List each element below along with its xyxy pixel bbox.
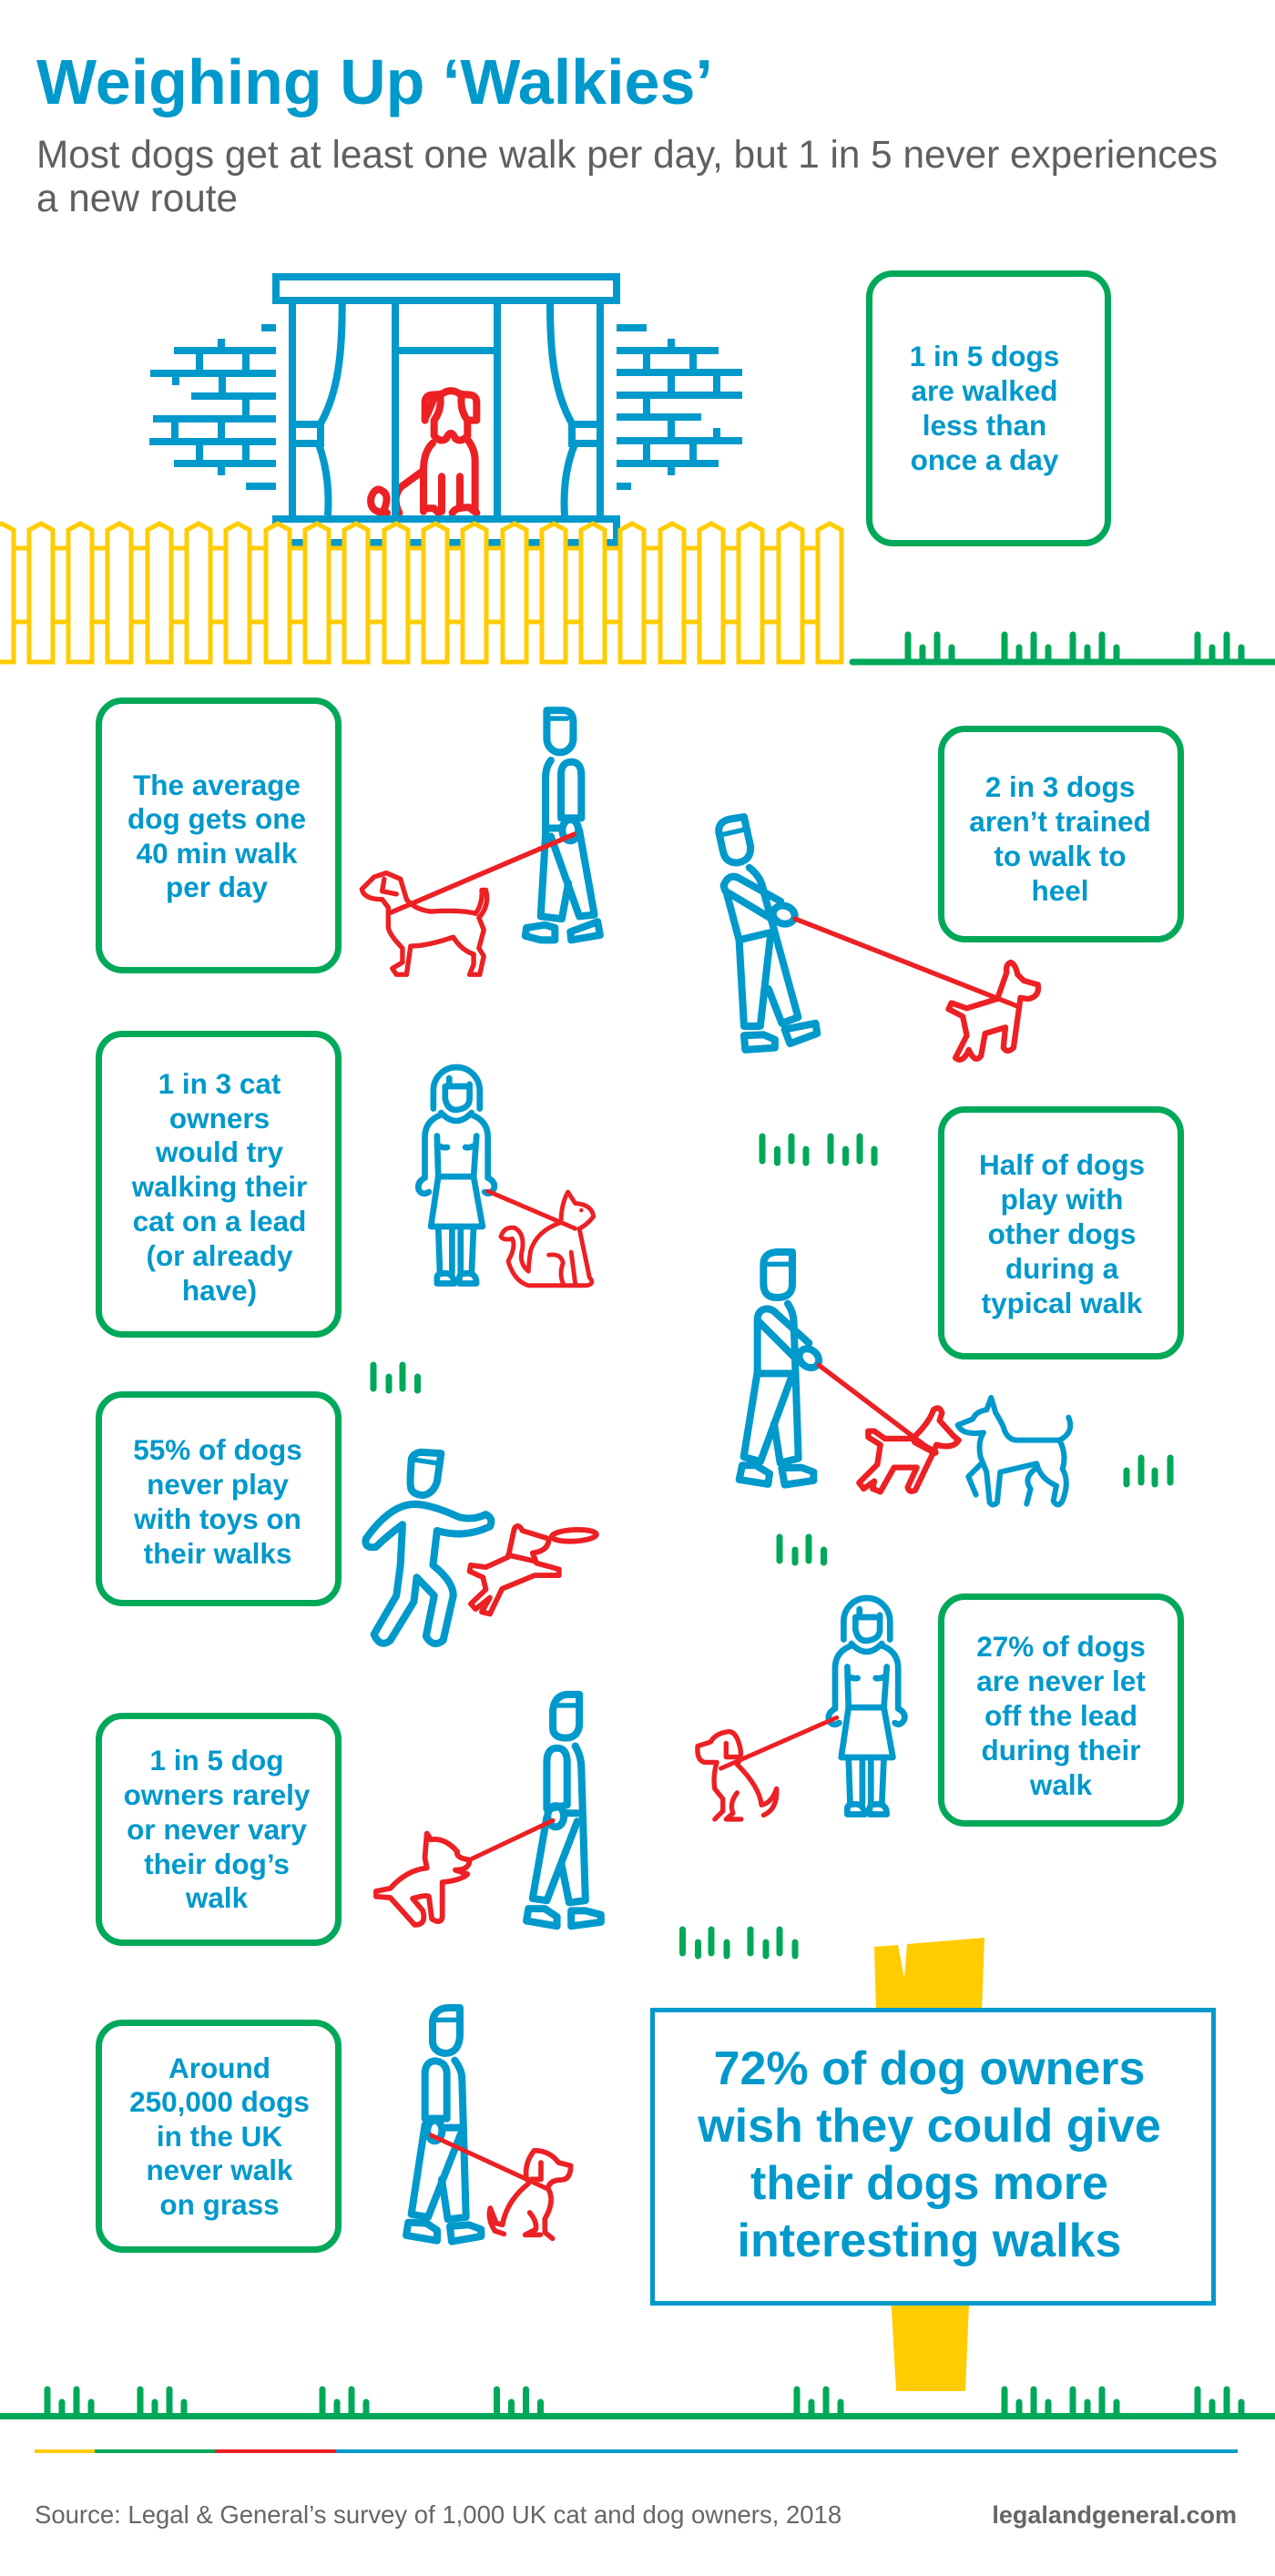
callout: 55% toys: 55% of dogs: [133, 1433, 302, 1466]
callout: around 250,000 dogs: never walk: [146, 2153, 293, 2186]
website: legalandgeneral.com: [992, 2501, 1237, 2529]
callout: cat owners: (or already: [146, 1239, 293, 1272]
illustration: brick wall right: [617, 328, 742, 486]
callout: cat owners: cat on a lead: [133, 1205, 306, 1237]
callout: 27% off lead: are never let: [976, 1665, 1146, 1697]
illustration: man with dog on lead: [376, 1695, 601, 1926]
illustration: picket fence: [0, 524, 842, 662]
callout: 27% off lead: 27% of dogs: [976, 1630, 1146, 1663]
illustration: man pulled by dog: [719, 817, 1038, 1060]
grass tuft: above sign: [683, 1929, 795, 1956]
callout: around 250,000 dogs: 250,000 dogs: [129, 2085, 310, 2118]
callout: half of dogs: during a: [1005, 1252, 1119, 1285]
grass tuft: right of dogs: [1127, 1458, 1170, 1484]
sign: 72% headline: interesting walks: [738, 2215, 1121, 2267]
illustration: man and two dogs meeting: [740, 1252, 1070, 1504]
callout: 2 in 3 dogs: to walk to: [994, 840, 1127, 872]
callout: cat owners: would try: [155, 1135, 283, 1168]
callout: 27% off lead: walk: [1029, 1768, 1093, 1801]
illustration: window: [276, 277, 617, 543]
grass tuft: middle right upper: [762, 1136, 874, 1163]
callout: 1 in 5 dogs: are walked: [911, 374, 1058, 407]
callout: 2 in 3 dogs: [942, 728, 1180, 940]
callout: around 250,000 dogs: Around: [168, 2052, 270, 2084]
callout: 2 in 3 dogs: heel: [1031, 874, 1089, 907]
callout: 55% toys: never play: [147, 1468, 289, 1501]
callout: cat owners: walking their: [131, 1170, 307, 1203]
callout: 27% off lead: [942, 1597, 1180, 1823]
callout: average walk: per day: [166, 871, 268, 903]
illustration: man and sitting dog: [406, 2008, 571, 2242]
callout: cat owners: owners: [169, 1102, 270, 1135]
ground: bottom with grass: [0, 2389, 1275, 2417]
callout: average walk: dog gets one: [128, 802, 306, 835]
callout: half of dogs: typical walk: [982, 1287, 1143, 1319]
footer colour rule: [35, 2449, 1238, 2453]
title: Weighing Up ‘Walkies’: [36, 46, 713, 117]
sign: 72% headline: [652, 2011, 1213, 2304]
callout: half of dogs: play with: [1001, 1183, 1123, 1216]
illustration: woman walking cat: [418, 1067, 594, 1286]
sign: 72% headline: 72% of dog owners: [714, 2042, 1145, 2095]
callout: 1 in 5 dogs: less than: [923, 409, 1046, 442]
callout: vary walk: walk: [185, 1881, 249, 1914]
callout: vary walk: [98, 1716, 339, 1943]
illustration: brick wall left: [149, 328, 276, 486]
callout: 55% toys: with toys on: [133, 1502, 301, 1535]
callout: 1 in 5 dogs: once a day: [911, 443, 1059, 476]
callout: vary walk: 1 in 5 dog: [149, 1744, 284, 1777]
callout: 27% off lead: during their: [982, 1734, 1140, 1767]
callout: 27% off lead: off the lead: [984, 1699, 1137, 1732]
callout: half of dogs: [942, 1109, 1180, 1357]
callout: vary walk: owners rarely: [124, 1778, 311, 1811]
illustration: man walking dog: [362, 710, 600, 974]
sign: 72% headline: wish they could give: [697, 2100, 1161, 2153]
callout: half of dogs: other dogs: [988, 1217, 1136, 1250]
callout: around 250,000 dogs: [98, 2023, 339, 2249]
callout: average walk: [98, 701, 339, 971]
callout: 55% toys: their walks: [144, 1537, 291, 1570]
subtitle: Most dogs get at least one walk per day, but 1 in 5 never experiences: [36, 133, 1218, 176]
signpost: yellow post: [874, 1938, 984, 2391]
callout: average walk: The average: [133, 769, 301, 801]
callout: cat owners: 1 in 3 cat: [158, 1067, 281, 1100]
sign: 72% headline: their dogs more: [750, 2157, 1108, 2210]
illustration: dog in window: [371, 391, 476, 513]
callout: 1 in 5 dogs: [869, 273, 1107, 543]
subtitle: a new route: [36, 177, 238, 219]
illustration: man throwing frisbee to dog: [365, 1452, 597, 1644]
callout: 2 in 3 dogs: 2 in 3 dogs: [985, 770, 1135, 803]
callout: 1 in 5 dogs: 1 in 5 dogs: [910, 340, 1059, 372]
callout: cat owners: [98, 1034, 339, 1335]
callout: around 250,000 dogs: on grass: [159, 2188, 280, 2221]
callout: 55% toys: [98, 1395, 339, 1603]
callout: 2 in 3 dogs: aren’t trained: [969, 805, 1151, 838]
callout: cat owners: have): [182, 1274, 257, 1307]
callout: half of dogs: Half of dogs: [979, 1148, 1145, 1181]
callout: vary walk: their dog’s: [144, 1848, 290, 1880]
source note: Source: Legal & General’s survey of 1,000 UK cat and dog owners, 2018: [35, 2500, 842, 2529]
grass tuft: under dogs: [780, 1537, 823, 1563]
grass tuft: left middle: [373, 1365, 417, 1390]
callout: vary walk: or never vary: [127, 1813, 307, 1846]
illustration: small dog on lead: [698, 1717, 837, 1819]
callout: average walk: 40 min walk: [137, 837, 298, 870]
illustration: woman walking dog: [829, 1598, 904, 1815]
callout: around 250,000 dogs: in the UK: [157, 2120, 282, 2153]
ground: top right: [852, 635, 1275, 662]
